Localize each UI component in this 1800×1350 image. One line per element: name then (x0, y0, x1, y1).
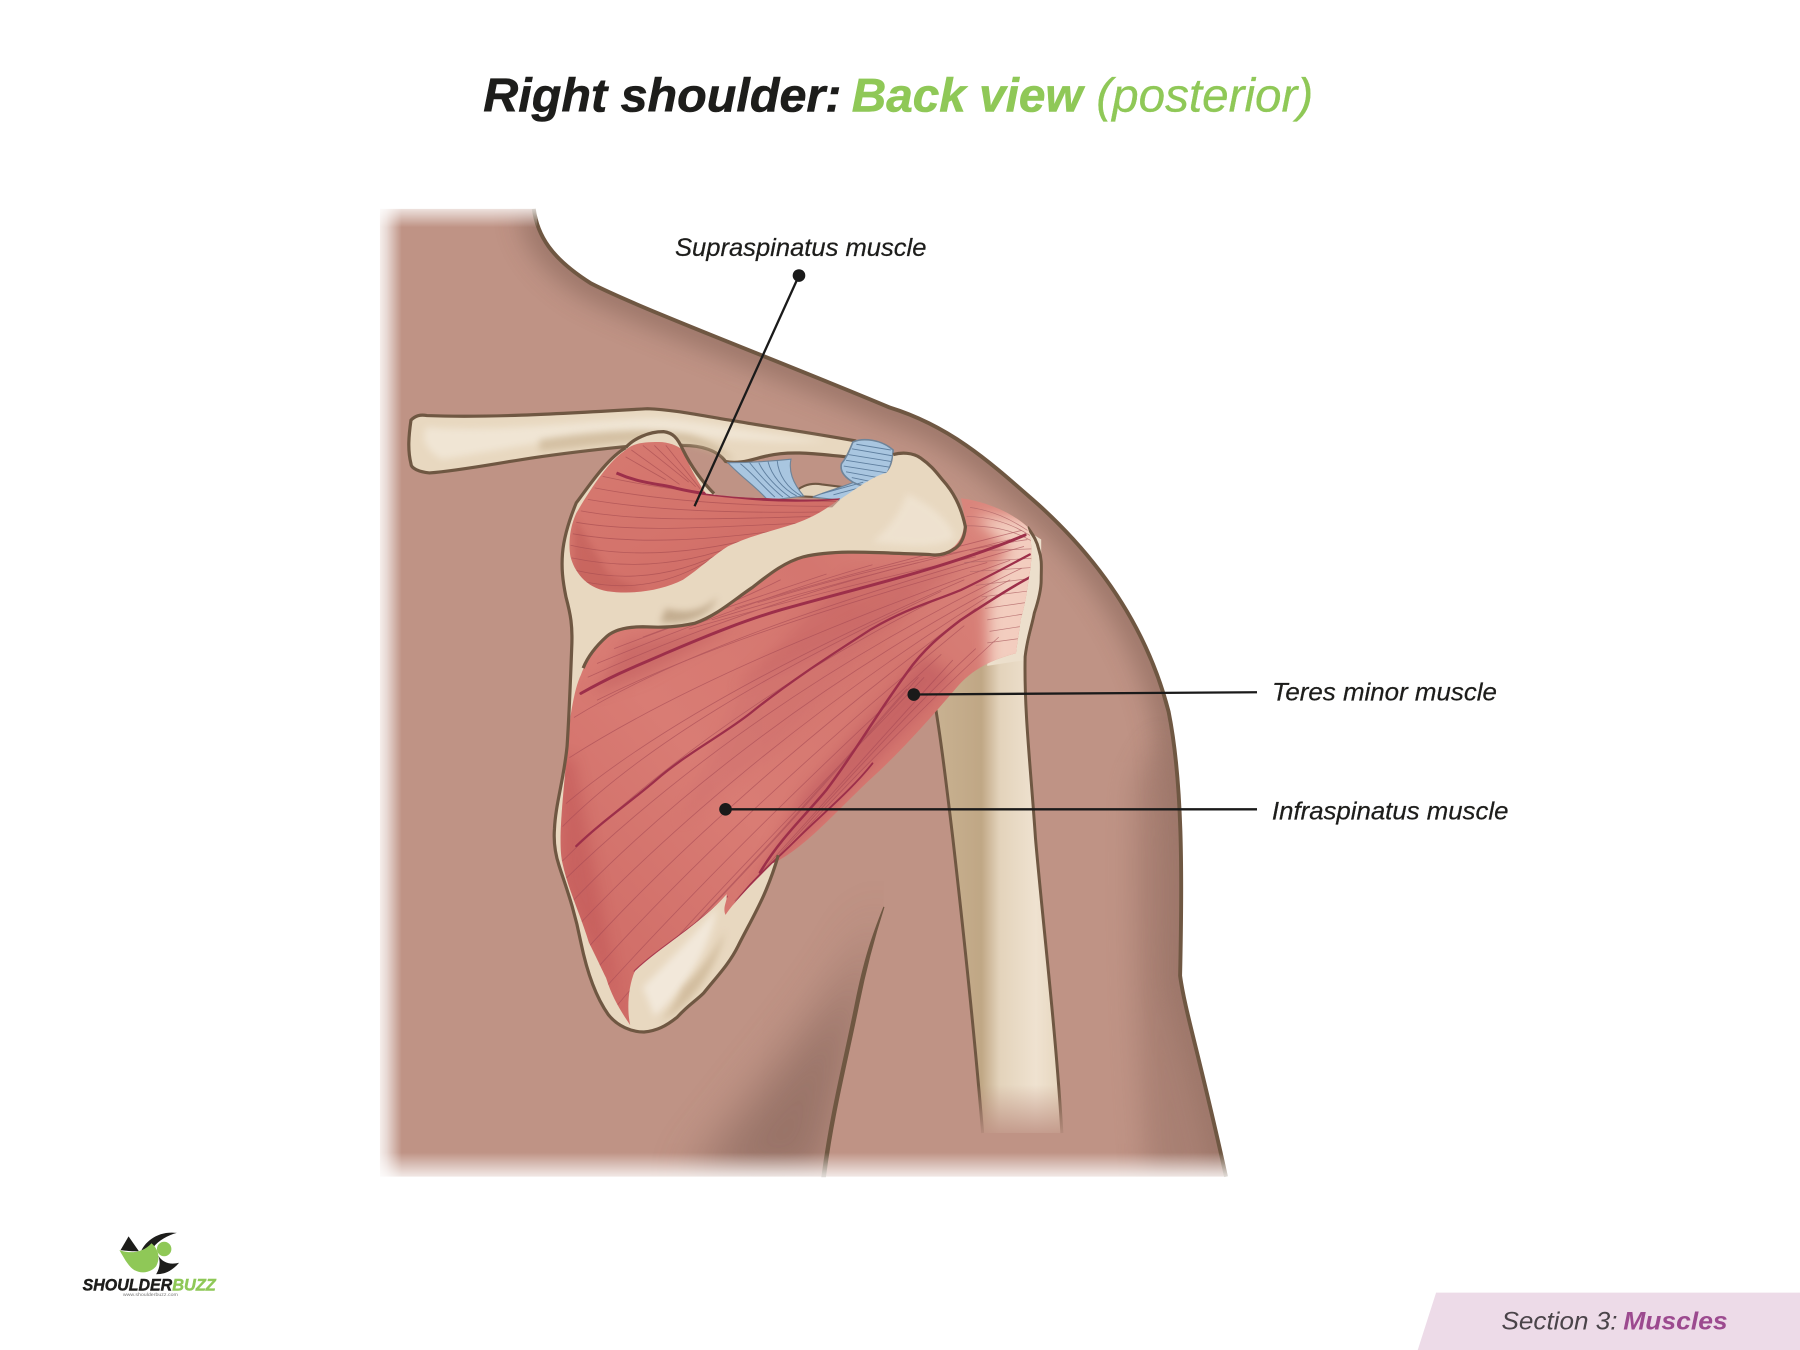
logo icon (119, 1233, 179, 1274)
section label: Muscles (1623, 1307, 1728, 1335)
dark muscle septa (576, 535, 1030, 971)
logo url: www.shoulderbuzz.com (123, 1292, 179, 1297)
bone shading (643, 494, 955, 1022)
supraspinatus muscle (569, 442, 840, 592)
logo wordmark: SHOULDER (83, 1275, 172, 1294)
body edge fade (374, 202, 1247, 1185)
humerus (932, 505, 1070, 1140)
section label (1502, 1307, 1728, 1335)
ligaments (728, 440, 893, 501)
section banner (1418, 1293, 1800, 1350)
supraspinatus leader line (695, 269, 805, 506)
scapula outline (554, 432, 965, 1032)
body silhouette (380, 209, 1226, 1182)
label: supraspinatus muscle: Supraspinatus muscle (675, 234, 926, 262)
scapula bone (554, 432, 965, 1032)
logo wordmark: BUZZ (172, 1275, 217, 1294)
title: Right shoulder: (483, 68, 841, 121)
logo wordmark (83, 1275, 217, 1294)
title: (posterior) (1096, 68, 1313, 121)
clavicle (409, 409, 855, 473)
title: Back view (852, 68, 1086, 121)
logo: ShoulderBuzz (83, 1233, 217, 1297)
infraspinatus leader line (719, 803, 1257, 816)
title (483, 68, 1313, 121)
coracoid glimpse (792, 484, 849, 498)
tendon highlight (975, 508, 1032, 668)
tendon fibres (964, 507, 1039, 643)
illustration: right shoulder posterior anatomy (374, 202, 1257, 1185)
armpit crease (822, 907, 884, 1177)
teres minor leader line (907, 688, 1257, 701)
section label: Section 3: (1502, 1307, 1617, 1335)
thin fibres (560, 530, 1027, 1010)
label: teres minor muscle: Teres minor muscle (1272, 678, 1497, 706)
label: infraspinatus muscle: Infraspinatus muscle (1272, 798, 1508, 826)
infraspinatus and teres minor muscles (558, 498, 1050, 1025)
